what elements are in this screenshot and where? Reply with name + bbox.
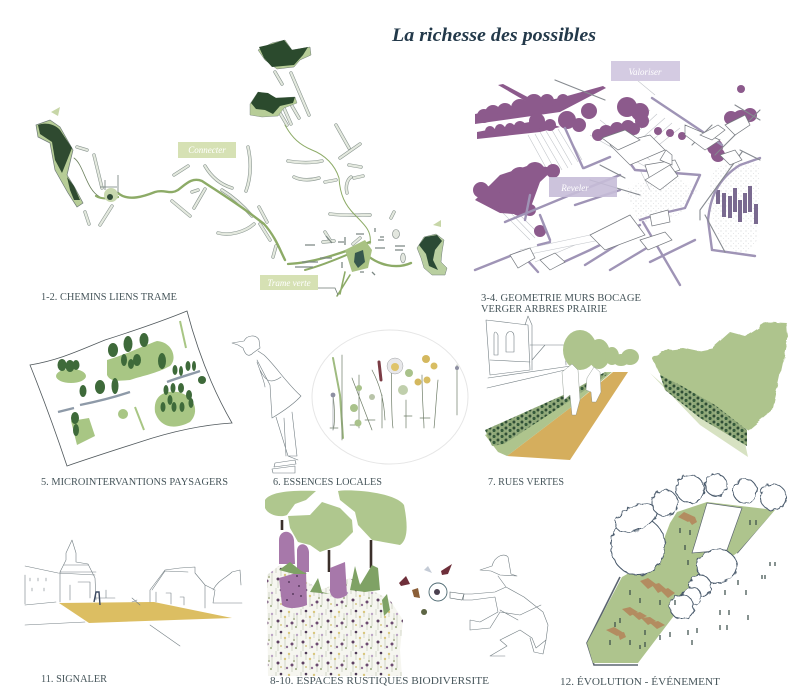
woodland north (250, 40, 311, 117)
panel: map of paths and green network (36, 40, 447, 296)
label: Valoriser (611, 61, 680, 81)
white building (692, 503, 742, 553)
label: Reveler: Reveler (560, 183, 589, 193)
trees (611, 474, 786, 619)
gardener (463, 555, 548, 656)
trees (58, 333, 206, 436)
pedestrian (94, 592, 100, 605)
caption 5: 5. MICROINTERVANTIONS PAYSAGERS (41, 477, 228, 488)
trunks (282, 520, 371, 572)
grasses (279, 562, 390, 616)
flower heads (331, 355, 459, 426)
green corridor (74, 125, 411, 296)
plant circle (312, 330, 468, 464)
building sketches (25, 540, 242, 646)
plants (330, 355, 457, 440)
panel: rustic biodiversity spaces (265, 490, 548, 676)
caption 7: 7. RUES VERTES (488, 477, 564, 488)
caption 3-4 (481, 293, 641, 315)
butterflies and magnifier (399, 564, 452, 615)
panel: micro-interventions map sheet (30, 311, 232, 466)
caption 11: 11. SIGNALER (41, 674, 107, 685)
distant trees (563, 330, 639, 370)
caption 6: 6. ESSENCES LOCALES (273, 477, 382, 488)
hedgerows (58, 371, 200, 412)
walls and roads (475, 80, 760, 285)
right planting (650, 373, 748, 457)
dark seeds on bush (286, 576, 302, 600)
walkers (562, 364, 580, 415)
label: Trame verte: Trame verte (267, 278, 311, 288)
title: La richesse des possibles (391, 25, 596, 46)
tan path (507, 372, 628, 460)
panel: signal square (25, 540, 242, 646)
left planting (485, 372, 612, 456)
label: Reveler (549, 177, 617, 197)
caption 12: 12. ÉVOLUTION - ÉVÉNEMENT (560, 676, 721, 688)
purple bushes (279, 532, 347, 608)
market tables (606, 512, 697, 640)
label: Trame verte (260, 275, 318, 290)
label: Connecter (178, 142, 236, 158)
yellow square (59, 602, 232, 623)
label: Valoriser: Valoriser (628, 67, 662, 77)
village clusters (100, 175, 405, 275)
tall hedge (652, 322, 788, 430)
lawn (587, 502, 775, 663)
panel: aerial village view (473, 61, 760, 285)
sheet (30, 311, 232, 466)
panel: green streets (485, 316, 788, 460)
canopy trees (265, 490, 407, 552)
caption 3-4: VERGER ARBRES PRAIRIE (481, 304, 607, 315)
figure (232, 336, 301, 473)
woodland left (36, 107, 83, 207)
caption 8-10: 8-10. ESPACES RUSTIQUES BIODIVERSITE (270, 676, 489, 687)
church sketch (486, 316, 578, 388)
stippled orchard and fields (500, 70, 760, 262)
label: Connecter: Connecter (188, 145, 226, 155)
meadow (267, 565, 403, 676)
caption 1-2: 1-2. CHEMINS LIENS TRAME (41, 292, 177, 303)
caption 3-4: 3-4. GEOMETRIE MURS BOCAGE (481, 293, 641, 304)
woodland east (417, 220, 447, 275)
buildings (510, 115, 750, 270)
green patches (56, 321, 195, 445)
panel: event evolution plan (587, 474, 786, 665)
outer wall (587, 577, 638, 665)
hedges network (77, 72, 394, 257)
people (610, 520, 775, 649)
purple hedges (473, 84, 758, 237)
panel: person looking at local plants (232, 330, 468, 473)
